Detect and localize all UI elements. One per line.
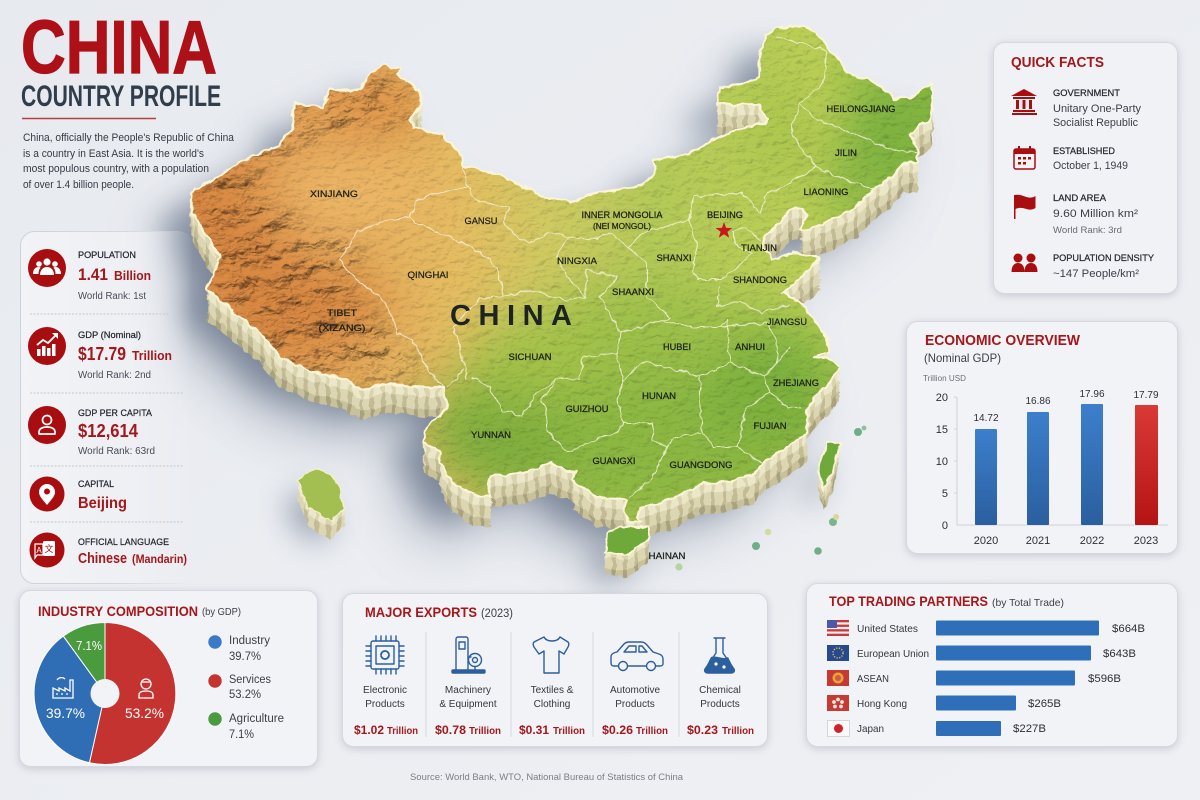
pie chart: 39.7% [46, 705, 85, 721]
fine texture [180, 20, 950, 540]
stat: GDP nominal: $17.79 [78, 344, 126, 364]
stat: GDP per capita: World Rank: 63rd [78, 446, 155, 457]
export: electronics: Products [365, 699, 405, 710]
province labels: JILIN [835, 148, 857, 158]
icon: Hong Kong flag [827, 695, 849, 711]
row: ASEAN: ASEAN [857, 673, 889, 685]
province labels: HAINAN [648, 551, 686, 561]
panel: top trading partners [806, 584, 1178, 746]
export: chemicals: Trillion [722, 725, 754, 737]
bar chart: nominal GDP [936, 389, 1168, 547]
pie chart [34, 622, 176, 764]
panel: major exports [342, 594, 768, 746]
legend: Agriculture [229, 713, 284, 725]
province labels: GUANGXI [592, 456, 636, 466]
bar chart: nominal GDP: 2020 [974, 535, 998, 547]
title: CHINA [21, 5, 217, 89]
icon: map pin [30, 476, 64, 512]
row: ASEAN [827, 670, 1121, 686]
subtitle: COUNTRY PROFILE [21, 80, 221, 113]
icon: microchip [366, 636, 404, 674]
province labels: ZHEJIANG [773, 378, 819, 388]
row: United States: $664B [1112, 623, 1145, 635]
province labels: BEIJING [707, 210, 743, 220]
province labels: TIANJIN [741, 243, 777, 253]
source note: Source: World Bank, WTO, National Bureau of Statistics of China [410, 772, 684, 783]
province labels: NINGXIA [557, 256, 598, 266]
province labels: ANHUI [735, 342, 765, 352]
intro paragraph: China, officially the People's Republic of China [23, 132, 234, 144]
legend: Services [229, 674, 271, 686]
province labels: (NEI MONGOL) [593, 222, 651, 231]
row: ASEAN: $596B [1088, 673, 1121, 685]
intro paragraph: of over 1.4 billion people. [23, 179, 134, 191]
icon: flag [1014, 195, 1036, 219]
icon: people [28, 249, 66, 287]
legend: 39.7% [229, 651, 261, 663]
bar chart: nominal GDP: 17.96 [1079, 389, 1105, 400]
fact: land area [1053, 193, 1138, 236]
fact: government: Unitary One-Party [1053, 103, 1141, 115]
export: electronics: Trillion [387, 725, 418, 737]
fact: land area: World Rank: 3rd [1053, 225, 1122, 236]
icon: flask [705, 638, 734, 673]
icon: population density [1012, 254, 1038, 272]
province labels: GUIZHOU [566, 404, 608, 414]
export: chemicals [687, 638, 754, 737]
stat: population: World Rank: 1st [78, 291, 146, 302]
export: automotive: Trillion [636, 725, 668, 737]
stat: capital: Beijing [78, 495, 127, 512]
icon: Japan flag [828, 720, 850, 736]
bar chart: nominal GDP: 5 [942, 488, 948, 500]
export: machinery: Trillion [469, 725, 501, 737]
intro paragraph [23, 132, 234, 191]
fact: population density [1053, 253, 1154, 280]
export: machinery: Machinery [445, 685, 491, 696]
heading: top trading partners: (by Total Trade) [992, 597, 1064, 609]
icon: language [30, 532, 64, 568]
province labels: HUNAN [642, 391, 676, 401]
icon: Beijing capital star [716, 222, 732, 238]
stat: GDP per capita: $12,614 [78, 421, 138, 441]
row: Hong Kong: Hong Kong [857, 698, 907, 710]
stat: population: POPULATION [78, 250, 136, 260]
intro paragraph: most populous country, with a population [23, 163, 209, 175]
heading: major exports: MAJOR EXPORTS [365, 604, 477, 620]
export: electronics: $1.02 [354, 723, 384, 737]
bar chart: nominal GDP: 20 [936, 392, 948, 404]
relief map of China [180, 20, 950, 577]
stat: capital: CAPITAL [78, 479, 114, 489]
fact: government: Socialist Republic [1053, 117, 1138, 129]
row: Hong Kong: $265B [1028, 698, 1061, 710]
bar chart: nominal GDP: 2023 [1134, 535, 1158, 547]
export: textiles [519, 637, 585, 737]
fact: land area: LAND AREA [1053, 193, 1107, 203]
icon: t-shirt [533, 637, 569, 673]
subheading: (Nominal GDP) [924, 351, 1001, 365]
province labels: GANSU [464, 216, 498, 226]
export: chemicals: Chemical [699, 685, 741, 696]
mountain relief [195, 70, 430, 385]
legend: Industry [229, 635, 270, 647]
panel: industry composition [20, 590, 318, 766]
province labels: SHANDONG [733, 275, 787, 285]
pie chart: 53.2% [125, 705, 164, 721]
export: automotive: Automotive [610, 685, 660, 696]
row: Japan: $227B [1013, 723, 1046, 735]
province labels: XINJIANG [310, 189, 358, 199]
row: United States [827, 620, 1145, 636]
province labels: INNER MONGOLIA [582, 210, 663, 220]
province labels: JIANGSU [767, 317, 807, 327]
stat: GDP per capita [28, 406, 155, 457]
province labels: SHANXI [656, 253, 692, 263]
stat: official language: (Mandarin) [132, 554, 187, 566]
row: European Union: European Union [857, 648, 929, 660]
panel: key statistics background [20, 232, 192, 584]
bar chart: nominal GDP: 2022 [1080, 535, 1104, 547]
icon: machine [452, 637, 485, 673]
icon: rising chart [28, 327, 66, 365]
fact: government: GOVERNMENT [1053, 88, 1120, 98]
small islands [675, 426, 866, 571]
icon: language: A [36, 546, 42, 555]
province labels: HUBEI [663, 342, 691, 352]
province boundaries [340, 37, 918, 497]
stat: GDP per capita: GDP PER CAPITA [78, 408, 153, 418]
export: textiles: $0.31 [519, 723, 549, 737]
fact: established: October 1, 1949 [1053, 160, 1128, 172]
export: electronics: Electronic [363, 685, 407, 696]
legend: 7.1% [229, 729, 254, 741]
heading: industry composition: (by GDP) [202, 606, 241, 618]
export: automotive [602, 642, 668, 737]
bar chart: nominal GDP: 2021 [1026, 535, 1050, 547]
row: Japan [828, 720, 1046, 736]
fact: population density: POPULATION DENSITY [1053, 253, 1154, 263]
province labels: QINGHAI [408, 270, 448, 280]
legend [208, 635, 284, 741]
map shadow [158, 52, 905, 581]
fact: established [1053, 146, 1128, 172]
fact: land area: 9.60 Million km² [1053, 208, 1138, 220]
stat: official language: Chinese [78, 551, 127, 567]
bar chart: nominal GDP: 15 [936, 424, 948, 436]
panel: quick facts [994, 42, 1178, 294]
stat: population [28, 249, 151, 302]
stat: GDP nominal: Trillion [132, 348, 172, 363]
export: chemicals: $0.23 [687, 723, 718, 737]
province labels: LIAONING [804, 187, 848, 197]
row: European Union [827, 645, 1136, 661]
bar chart: nominal GDP: 14.72 [973, 413, 999, 424]
province labels: SICHUAN [508, 352, 552, 362]
province labels: GUANGDONG [670, 460, 732, 470]
export: machinery: & Equipment [439, 699, 497, 710]
fact: established: ESTABLISHED [1053, 146, 1115, 156]
heading: industry composition: INDUSTRY COMPOSITION [38, 603, 198, 619]
icon: factory [53, 678, 73, 698]
export: machinery [435, 637, 501, 737]
map title: CHINA: CHINA [450, 300, 572, 332]
row: European Union: $643B [1103, 648, 1136, 660]
heading: major exports: (2023) [481, 608, 513, 620]
heading: economic overview: ECONOMIC OVERVIEW [925, 333, 1080, 349]
bar chart: nominal GDP: 17.79 [1133, 390, 1159, 401]
bar chart: nominal GDP: 10 [936, 456, 948, 468]
axis unit: Trillion USD [923, 374, 966, 383]
icon: worker [139, 679, 153, 698]
island: west islet [297, 468, 345, 539]
panel: economic overview [906, 322, 1178, 554]
province labels: YUNNAN [471, 430, 511, 440]
province labels: TIBET [327, 308, 357, 318]
heading: quick facts: QUICK FACTS [1011, 55, 1104, 71]
province labels [310, 104, 896, 561]
export: textiles: Clothing [534, 699, 570, 710]
island: Hainan [605, 527, 648, 577]
row: Hong Kong [827, 695, 1061, 711]
province labels: HEILONGJIANG [826, 104, 896, 114]
province labels: (XIZANG) [318, 323, 366, 333]
icon: calendar [1014, 146, 1035, 169]
stat: official language: OFFICIAL LANGUAGE [78, 537, 169, 547]
row: United States: United States [857, 623, 918, 635]
map terrain surface [180, 20, 950, 540]
intro paragraph: is a country in East Asia. It is the world's [23, 148, 205, 160]
province labels: FUJIAN [754, 421, 786, 431]
bar chart: nominal GDP: 16.86 [1025, 396, 1051, 407]
icon: ASEAN flag [827, 670, 849, 686]
icon: government building [1011, 89, 1037, 115]
icon: EU flag [827, 645, 849, 661]
fact: government [1053, 88, 1141, 129]
pie chart: 7.1% [76, 639, 102, 653]
row: Japan: Japan [857, 723, 884, 735]
map walls [190, 29, 933, 553]
export: electronics [354, 636, 418, 737]
stat: capital [30, 476, 127, 512]
icon: person [28, 406, 66, 444]
stat: population: Billion [114, 268, 151, 283]
export: machinery: $0.78 [435, 723, 466, 737]
island: Taiwan [818, 442, 840, 510]
icon: car [611, 642, 663, 670]
bar chart: nominal GDP: 0 [942, 520, 948, 532]
icon: US flag [827, 620, 849, 636]
panel: key statistics [28, 249, 187, 568]
fact: population density: ~147 People/km² [1053, 268, 1139, 280]
legend: 53.2% [229, 689, 261, 701]
export: chemicals: Products [700, 699, 740, 710]
stat: GDP nominal [28, 327, 172, 381]
export: automotive: Products [615, 699, 655, 710]
export: textiles: Textiles & [531, 685, 574, 696]
export: textiles: Trillion [553, 725, 585, 737]
stat: official language [30, 532, 187, 568]
stat: GDP nominal: World Rank: 2nd [78, 370, 151, 381]
stat: GDP nominal: GDP (Nominal) [78, 330, 141, 340]
export: automotive: $0.26 [602, 723, 633, 737]
province labels: SHAANXI [612, 287, 654, 297]
heading: top trading partners: TOP TRADING PARTNERS [829, 593, 988, 609]
icon: language: 文 [44, 543, 54, 554]
stat: population: 1.41 [78, 265, 108, 284]
